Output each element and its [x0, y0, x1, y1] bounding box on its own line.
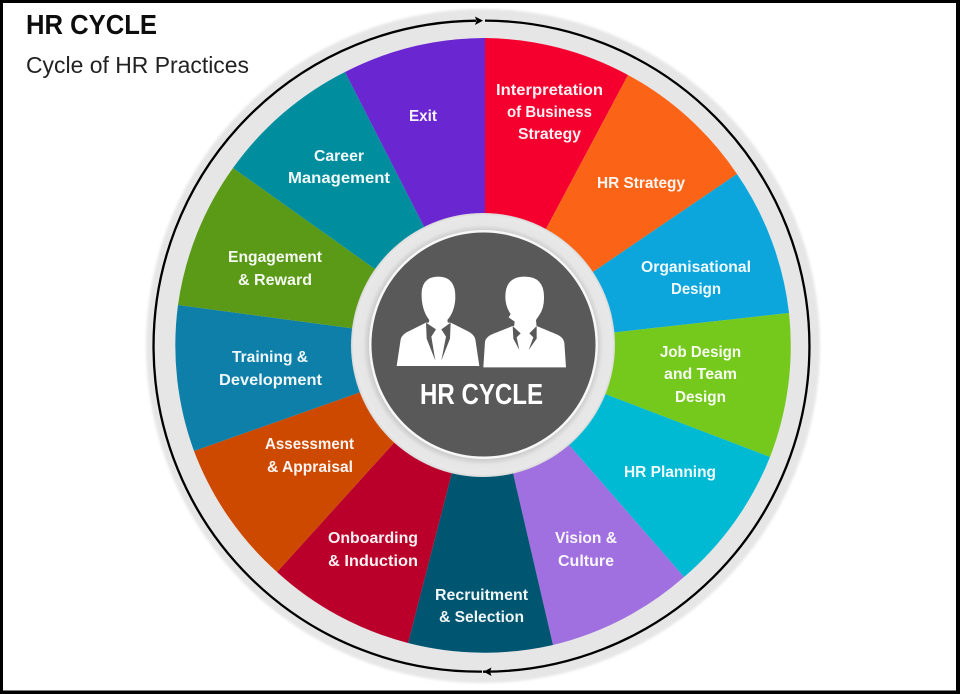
- segment: Onboarding & Induction: Onboarding: [328, 530, 418, 547]
- segment: Assessment & Appraisal: [194, 381, 416, 572]
- segment: Onboarding & Induction: & Induction: [328, 553, 418, 570]
- wheel of 13 segments: [175, 38, 791, 653]
- segment: Job Design and Team Design: Design: [675, 389, 726, 406]
- circular arrow: clockwise cycle: [154, 16, 809, 676]
- icon: businessman: [397, 277, 479, 366]
- segment: Assessment & Appraisal: & Appraisal: [267, 459, 353, 476]
- segment: Assessment & Appraisal: Assessment: [265, 436, 354, 453]
- segment: Job Design and Team Design: Job Design: [660, 344, 741, 361]
- hub label: HR CYCLE: [420, 379, 543, 411]
- hub grey ring: [351, 213, 615, 477]
- segment: Organisational Design: Design: [671, 281, 721, 298]
- segment: HR Strategy: [530, 75, 737, 291]
- segment: Job Design and Team Design: and Team: [664, 366, 737, 383]
- segment: Recruitment & Selection: & Selection: [439, 609, 524, 626]
- segment: Interpretation of Business Strategy: Strategy: [518, 126, 581, 143]
- hub dark disc: [372, 232, 596, 456]
- outer grey ring: [146, 9, 820, 683]
- segment: Career Management: Career: [314, 148, 364, 165]
- segment: Vision & Culture: Vision &: [555, 530, 617, 547]
- segment: Exit: [345, 38, 485, 256]
- centre hub: [351, 213, 615, 477]
- segment: Career Management: Management: [288, 170, 390, 187]
- segment: Vision & Culture: Culture: [558, 553, 614, 570]
- icon: two business people: [397, 277, 566, 367]
- segment: Interpretation of Business Strategy: Interpretation: [496, 82, 603, 99]
- subtitle: Cycle of HR Practices: [26, 52, 249, 78]
- icon: businesswoman: [483, 277, 566, 367]
- segment: Interpretation of Business Strategy: [485, 38, 628, 258]
- segment: Career Management: [233, 72, 439, 288]
- segment: HR Strategy: HR Strategy: [597, 175, 685, 192]
- segment: Onboarding & Induction: [277, 419, 460, 643]
- segment: Vision & Culture: [506, 422, 684, 645]
- hub white rim: [369, 230, 598, 459]
- segment: Organisational Design: [565, 174, 789, 336]
- segment: Training & Development: Training &: [232, 349, 308, 366]
- segment: Organisational Design: Organisational: [641, 259, 751, 276]
- segment: Engagement & Reward: [178, 168, 402, 333]
- segment: Recruitment & Selection: [408, 441, 553, 653]
- segment: Training & Development: [175, 305, 392, 451]
- segment: Exit: Exit: [409, 108, 437, 125]
- segment: Engagement & Reward: Engagement: [228, 249, 322, 266]
- segment: Interpretation of Business Strategy: of Business: [507, 104, 592, 121]
- segment: Training & Development: Development: [219, 372, 322, 389]
- segment: Job Design and Team Design: [575, 313, 791, 457]
- title: HR CYCLE: [26, 9, 157, 40]
- segment: HR Planning: HR Planning: [624, 464, 716, 481]
- segment: HR Planning: [549, 382, 770, 577]
- segment: Engagement & Reward: & Reward: [238, 272, 312, 289]
- segment: Recruitment & Selection: Recruitment: [435, 587, 528, 604]
